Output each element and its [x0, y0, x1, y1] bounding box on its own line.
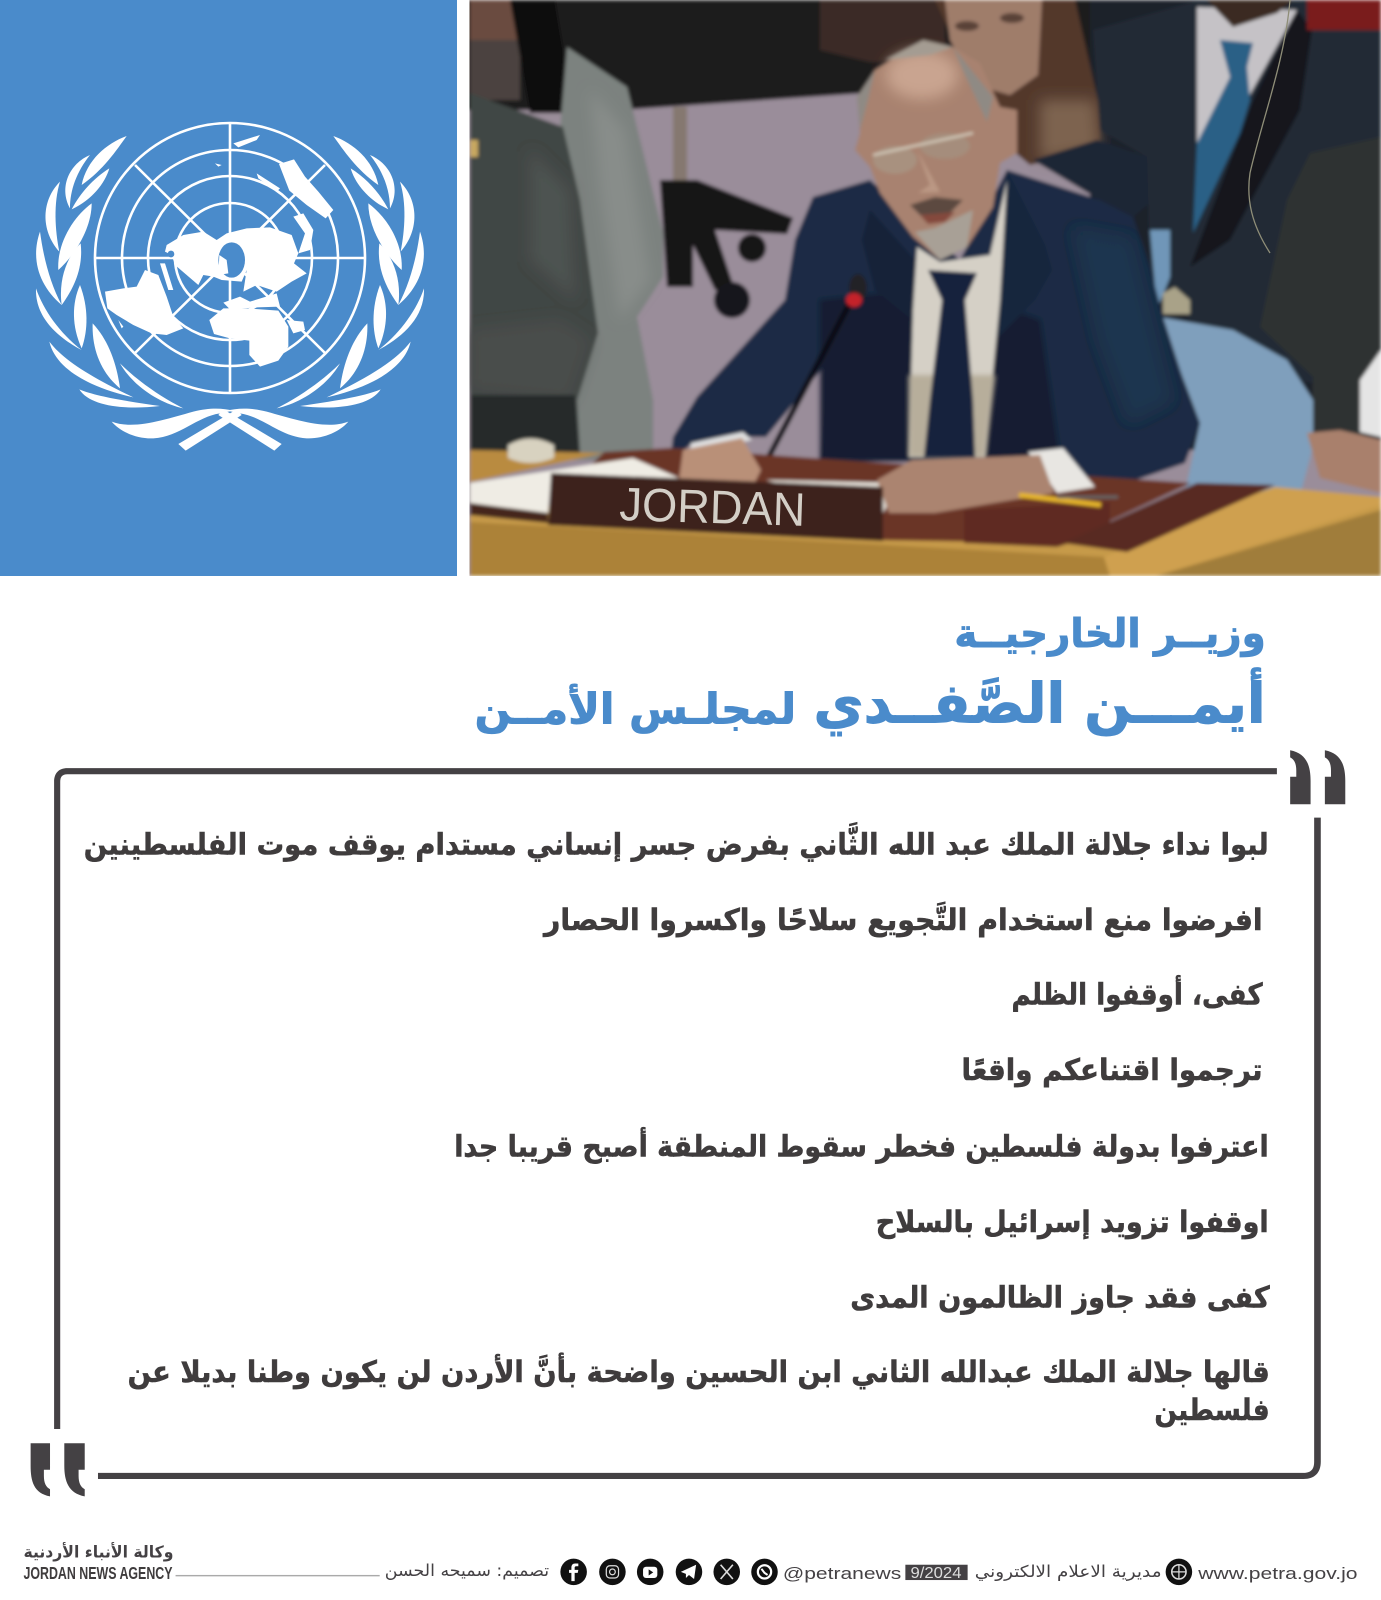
box, tray, pencil [964, 502, 1110, 547]
quote 2: افرضوا منع استخدام التَّجويع سلاحًا واكسروا الحصار [542, 900, 1263, 938]
social icons [560, 1559, 778, 1585]
far right man [1260, 137, 1381, 435]
icon: globe grid [95, 123, 365, 393]
office chair [673, 107, 687, 180]
directorate name: مديرية الاعلام الالكتروني [975, 1562, 1162, 1582]
icon: continents [105, 135, 333, 367]
agency logo [23, 1542, 174, 1583]
icon: telegram [676, 1559, 702, 1585]
quote 8: قالها جلالة الملك عبدالله الثاني ابن الحسين واضحة بأنَّ الأردن لن يكون وطنا بديلا عن [128, 1353, 1270, 1390]
quote 5: اعترفوا بدولة فلسطين فخطر سقوط المنطقة أصبح قريبا جدا [454, 1127, 1269, 1163]
quote 6: اوقفوا تزويد إسرائيل بالسلاح [876, 1205, 1269, 1240]
nameplate text: JORDAN [619, 477, 806, 536]
website: www.petra.gov.jo [1197, 1565, 1358, 1583]
papers [470, 458, 679, 513]
subject: لمجلـس الأمــن [475, 684, 796, 735]
title line 2 [475, 668, 1266, 737]
agency logo: JORDAN NEWS AGENCY [23, 1563, 173, 1583]
agency logo: وكالة الأنباء الأردنية [23, 1542, 174, 1562]
microphone [766, 304, 851, 458]
blue chair [1160, 317, 1313, 492]
icon: olive wreath [36, 136, 424, 451]
body text [84, 821, 1270, 1427]
quote 3: كفى، أوقفوا الظلم [1012, 975, 1263, 1011]
quote 4: ترجموا اقتناعكم واقعًا [961, 1053, 1263, 1087]
icon: opening quote mark [31, 1443, 85, 1496]
icon: X [713, 1559, 740, 1585]
earpiece wire [1249, 0, 1290, 253]
title line 1: وزيــر الخارجيــة [954, 611, 1266, 657]
icon: youtube [637, 1559, 663, 1585]
woman left [470, 0, 520, 42]
quote frame [54, 768, 1321, 1479]
nameplate [548, 473, 883, 541]
quote 8 continuation: فلسطين [1154, 1393, 1270, 1427]
icon: globe [1166, 1559, 1192, 1585]
handle: @petranews [783, 1565, 901, 1583]
icon: whatsapp [751, 1559, 778, 1585]
icon: instagram [599, 1559, 626, 1585]
date badge: 9/2024 [910, 1565, 962, 1582]
name: أيمـــن الصَّفــدي [813, 668, 1266, 737]
desk top and front [470, 450, 604, 482]
suit [670, 170, 1200, 493]
woman behind [935, 0, 1100, 165]
icon: closing quote mark [1290, 750, 1345, 804]
man right [1093, 0, 1381, 400]
designer credit: تصميم: سميحه الحسن [385, 1561, 549, 1581]
man left [470, 93, 598, 455]
icon: facebook [560, 1559, 587, 1585]
shirt and tie [909, 180, 1007, 457]
panel: UN emblem on blue [0, 0, 457, 576]
quote 1: لبوا نداء جلالة الملك عبد الله الثَّاني بفرض جسر إنساني مستدام يوقف موت الفلسطينين [84, 821, 1269, 862]
leather surface [548, 448, 1191, 543]
panel: photo of the minister at the Security Council [460, 0, 1381, 576]
footer [23, 1542, 1358, 1585]
head [855, 40, 1017, 260]
hands and cuffs [690, 432, 752, 452]
quote 7: كفى فقد جاوز الظالمون المدى [850, 1281, 1270, 1315]
